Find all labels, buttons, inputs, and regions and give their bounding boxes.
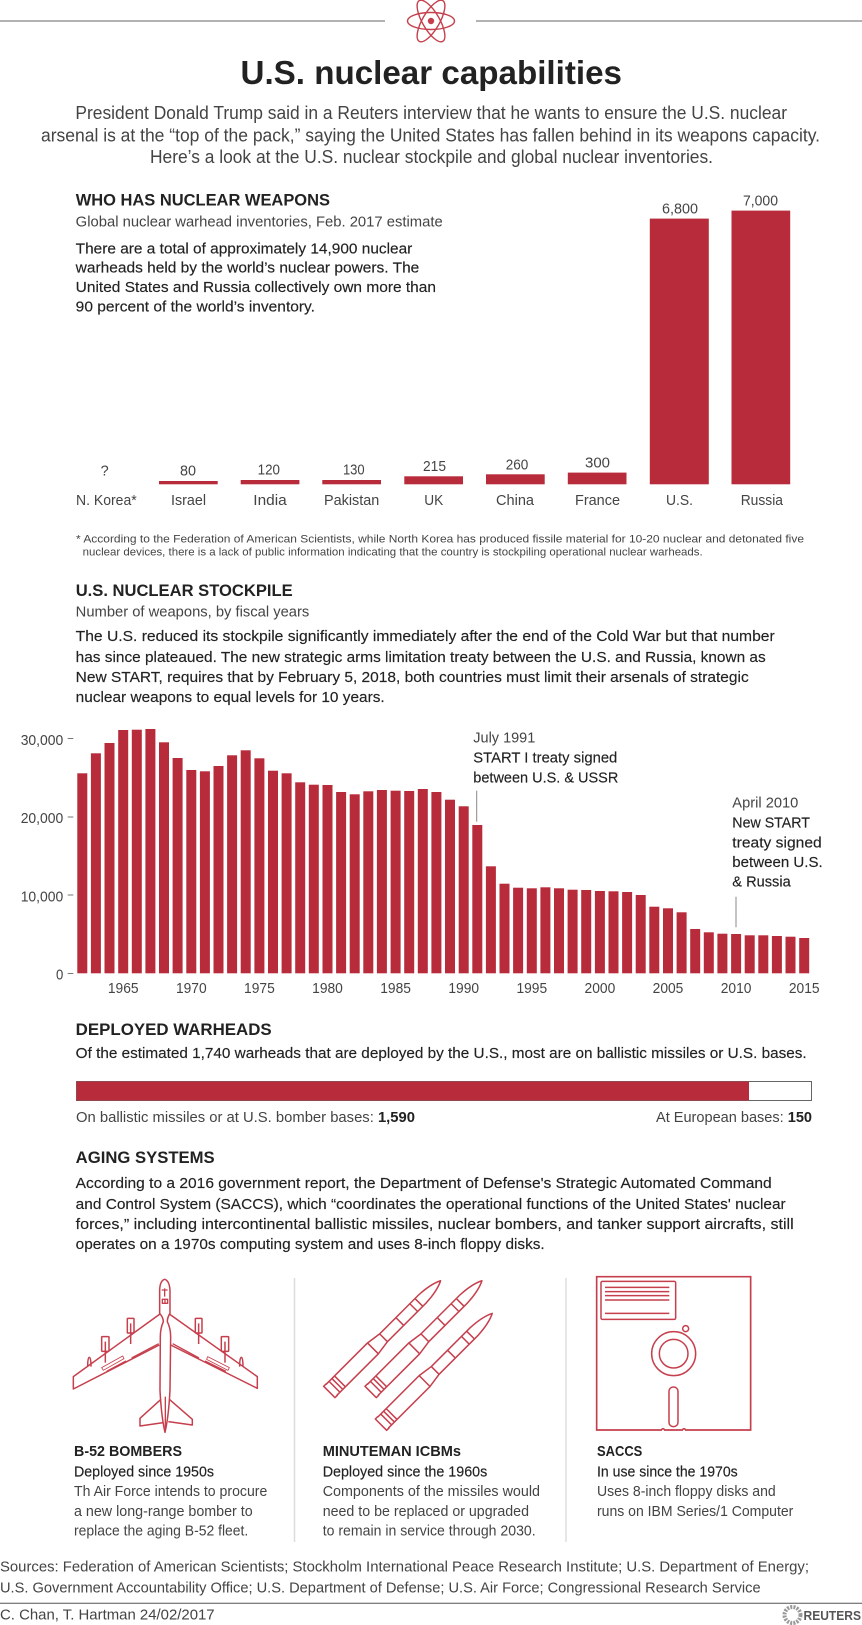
intro text xyxy=(41,102,820,167)
bar chart: warheads by country: India xyxy=(253,492,287,509)
intro text: Here’s a look at the U.S. nuclear stockpile and global nuclear inventories. xyxy=(150,146,713,167)
bar chart: warheads by country: 300 xyxy=(585,456,610,472)
bar chart: warheads by country: 120 xyxy=(258,463,280,479)
subheading: inventories: Global nuclear warhead inventories, Feb. 2017 estimate xyxy=(76,215,443,231)
heading: who has nuclear weapons: WHO HAS NUCLEAR WEAPONS xyxy=(76,190,330,209)
heading: U.S. nuclear stockpile: U.S. NUCLEAR STOCKPILE xyxy=(76,581,293,600)
caption: SACCS: SACCS xyxy=(597,1443,642,1460)
icon: B-52 bomber xyxy=(73,1279,257,1432)
caption: B-52 bombers: Th Air Force intends to procure xyxy=(74,1483,267,1500)
icon: floppy disk xyxy=(597,1277,751,1430)
x axis labels: 1985 xyxy=(380,981,411,997)
bar chart: warheads by country: N. Korea* xyxy=(76,492,137,509)
y axis: 30,000 xyxy=(21,732,63,749)
icon: Minuteman missiles xyxy=(324,1275,498,1430)
label: European bases: At European bases: 150 xyxy=(656,1109,812,1126)
footnote: * According to the Federation of American Scientists, while North Korea has produced fissile material for 10-20 nuclear and detonated five xyxy=(76,533,804,545)
y axis: 10,000 xyxy=(21,889,63,906)
heading: aging systems: AGING SYSTEMS xyxy=(76,1148,215,1167)
bar chart: warheads by country: ? xyxy=(101,464,109,480)
text block: aging summary: According to a 2016 government report, the Department of Defense's Strategic Automated Command xyxy=(76,1175,772,1192)
bars xyxy=(77,729,809,973)
callout: April 2010: April 2010 xyxy=(732,795,798,812)
credit: C. Chan, T. Hartman 24/02/2017 xyxy=(0,1606,215,1624)
x axis labels: 1990 xyxy=(448,981,479,997)
x axis labels: 1975 xyxy=(244,981,275,997)
bar chart: warheads by country: France xyxy=(575,492,620,509)
x axis labels: 2015 xyxy=(789,981,820,997)
caption: Minuteman ICBMs: Components of the missiles would xyxy=(323,1483,540,1500)
footnote xyxy=(76,533,804,558)
x axis labels: 1995 xyxy=(516,981,547,997)
text block: stockpile summary: New START, requires that by February 5, 2018, both countries must limit their arsenals of strategic xyxy=(76,669,749,686)
panel: who has nuclear weapons xyxy=(75,190,804,558)
caption: B-52 bombers: Deployed since 1950s xyxy=(74,1463,214,1480)
text block: inventories summary: 90 percent of the world’s inventory. xyxy=(76,299,315,316)
bar chart: warheads by country: Israel xyxy=(171,492,206,509)
x axis labels: 2005 xyxy=(653,981,683,997)
text block: stockpile summary: The U.S. reduced its stockpile significantly immediately after the end of the Cold War but that number xyxy=(76,628,775,645)
x axis labels: 2000 xyxy=(585,981,615,997)
callout: April 2010 xyxy=(732,795,823,927)
y axis xyxy=(21,732,73,983)
caption: B-52 bombers: B-52 BOMBERS xyxy=(74,1443,182,1460)
sources: U.S. Government Accountability Office; U.S. Department of Defense; U.S. Air Force; Congressional Research Service xyxy=(0,1580,761,1596)
x axis labels: 1980 xyxy=(312,981,343,997)
bar chart: warheads by country: 6,800 xyxy=(662,202,698,218)
y axis: 0 xyxy=(56,966,63,983)
heading: deployed warheads: DEPLOYED WARHEADS xyxy=(76,1020,272,1039)
caption: SACCS: runs on IBM Series/1 Computer xyxy=(597,1503,793,1520)
bar chart: warheads by country: Pakistan xyxy=(324,492,379,509)
title: U.S. nuclear capabilities xyxy=(240,54,622,91)
callout: July 1991: July 1991 xyxy=(473,730,535,747)
caption: Minuteman ICBMs xyxy=(323,1443,540,1540)
missile 1 xyxy=(324,1275,446,1398)
caption: SACCS xyxy=(597,1443,793,1520)
text block: aging summary xyxy=(76,1175,794,1253)
bar chart: warheads by country: 130 xyxy=(343,463,365,479)
bar chart: warheads by country: China xyxy=(496,492,535,509)
stacked bar: deployed split xyxy=(76,1082,812,1100)
callout: April 2010: New START xyxy=(732,814,810,831)
caption: SACCS: In use since the 1970s xyxy=(597,1463,738,1480)
x axis labels: 1970 xyxy=(176,981,207,997)
caption: B-52 bombers: replace the aging B-52 fleet. xyxy=(74,1523,248,1540)
text block: deployed summary: Of the estimated 1,740 warheads that are deployed by the U.S., most are on ballistic missiles or U.S. bases. xyxy=(76,1045,807,1062)
callout: July 1991: START I treaty signed xyxy=(473,750,617,767)
callout: April 2010: between U.S. xyxy=(732,854,823,871)
callout: April 2010: & Russia xyxy=(732,874,791,891)
text block: inventories summary: There are a total of approximately 14,900 nuclear xyxy=(76,240,412,257)
intro text: arsenal is at the “top of the pack,” saying the United States has fallen behind in its weapons capacity. xyxy=(41,124,820,146)
sources xyxy=(0,1558,809,1596)
caption: Minuteman ICBMs: Deployed since the 1960s xyxy=(323,1463,487,1480)
bar chart: warheads by country: Russia xyxy=(741,492,784,509)
text block: stockpile summary: has since plateaued. The new strategic arms limitation treaty between the U.S. and Russia, known as xyxy=(76,649,766,666)
text block: aging summary: forces,” including intercontinental ballistic missiles, nuclear bombers, and tanker support aircrafts, still xyxy=(76,1216,794,1233)
panel: deployed warheads xyxy=(76,1020,812,1126)
caption: Minuteman ICBMs: MINUTEMAN ICBMs xyxy=(323,1443,461,1460)
text block: stockpile summary xyxy=(76,628,775,706)
icon: atom xyxy=(408,0,454,46)
missile 2 xyxy=(365,1275,488,1398)
text block: inventories summary xyxy=(75,240,436,316)
caption: Minuteman ICBMs: need to be replaced or upgraded xyxy=(323,1503,529,1520)
caption: Minuteman ICBMs: to remain in service through 2030. xyxy=(323,1523,536,1540)
text block: inventories summary: warheads held by the world’s nuclear powers. The xyxy=(75,260,419,277)
footnote: nuclear devices, there is a lack of public information indicating that the country is stockpiling operational nuclear warheads. xyxy=(83,546,703,558)
text block: aging summary: operates on a 1970s computing system and uses 8-inch floppy disks. xyxy=(76,1236,545,1253)
bar chart: warheads by country xyxy=(76,194,790,509)
bar chart: warheads by country: 215 xyxy=(423,459,446,475)
caption: B-52 bombers: a new long-range bomber to xyxy=(74,1503,253,1520)
caption: SACCS: Uses 8-inch floppy disks and xyxy=(597,1483,776,1500)
text block: inventories summary: United States and Russia collectively own more than xyxy=(76,279,436,296)
panel: U.S. nuclear stockpile xyxy=(21,581,823,997)
bar chart: stockpile by year xyxy=(21,729,823,997)
bar chart: warheads by country: 7,000 xyxy=(743,194,778,210)
bar chart: warheads by country: 260 xyxy=(506,458,528,474)
subheading: number of weapons: Number of weapons, by fiscal years xyxy=(76,605,309,621)
x axis labels: 2010 xyxy=(721,981,751,997)
x axis labels xyxy=(108,981,820,997)
caption: B-52 bombers xyxy=(74,1443,267,1540)
x axis labels: 1965 xyxy=(108,981,139,997)
callout: July 1991 xyxy=(473,730,618,822)
text block: aging summary: and Control System (SACCS), which “coordinates the operational functions of the United States' nuclear xyxy=(76,1196,786,1213)
callout: July 1991: between U.S. & USSR xyxy=(473,769,618,786)
callout: April 2010: treaty signed xyxy=(732,834,822,851)
text block: stockpile summary: nuclear weapons to equal levels for 10 years. xyxy=(76,689,385,706)
panel: aging systems xyxy=(73,1148,794,1542)
label: ballistic missiles: On ballistic missiles or at U.S. bomber bases: 1,590 xyxy=(76,1109,415,1126)
bar chart: warheads by country: UK xyxy=(424,492,443,509)
missile 3 xyxy=(375,1308,498,1430)
logo: Reuters xyxy=(784,1607,861,1623)
y axis: 20,000 xyxy=(21,810,63,827)
bar chart: warheads by country: 80 xyxy=(180,464,196,480)
bar chart: warheads by country: U.S. xyxy=(666,492,693,509)
sources: Sources: Federation of American Scientists; Stockholm International Peace Research Institute; U.S. Department of Energy; xyxy=(0,1558,809,1576)
intro text: President Donald Trump said in a Reuters interview that he wants to ensure the U.S. nuclear xyxy=(75,102,787,123)
